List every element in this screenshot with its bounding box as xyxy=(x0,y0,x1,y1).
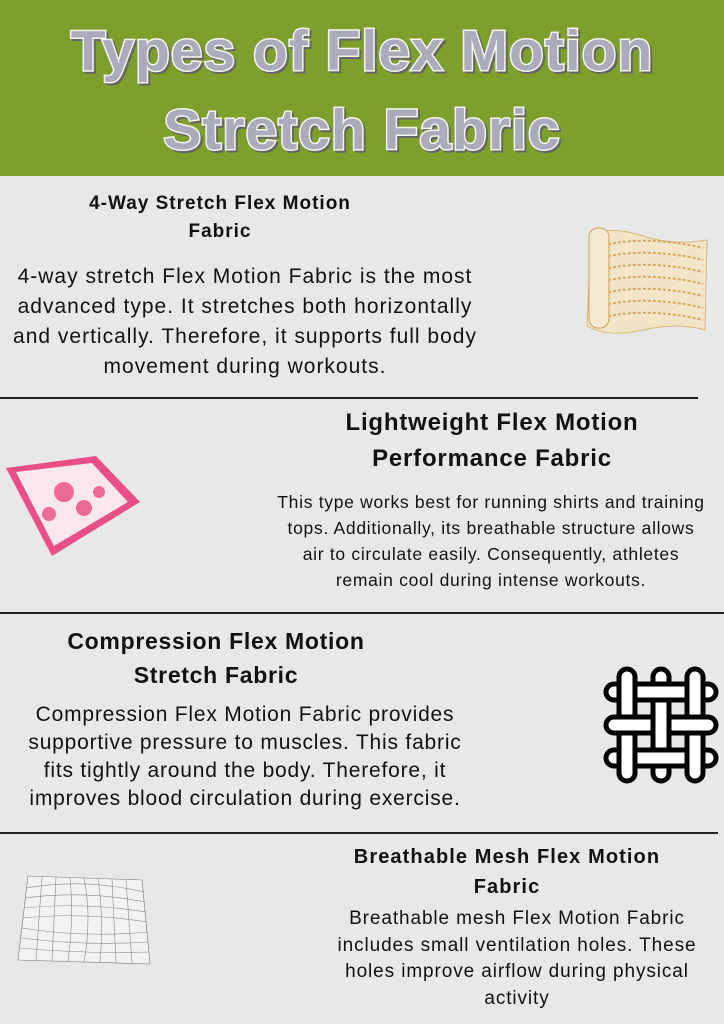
section 4 text: Breathable mesh Flex Motion Fabric xyxy=(349,908,685,929)
section 2 text: remain cool during intense workouts. xyxy=(336,570,646,590)
section 4 text xyxy=(338,908,696,1008)
title: Types of Flex Motion xyxy=(71,19,653,83)
section 3 heading xyxy=(67,628,365,688)
section 2 text: This type works best for running shirts and training xyxy=(277,492,705,512)
section 4 text: activity xyxy=(484,988,550,1008)
section 4 heading xyxy=(354,846,660,898)
section 4 text: holes improve airflow during physical xyxy=(345,961,689,982)
icon: pink scarf xyxy=(6,456,140,556)
section 1 text: movement during workouts. xyxy=(104,355,386,378)
section 2 heading: Performance Fabric xyxy=(372,445,612,472)
title xyxy=(70,19,655,164)
section 3 text: fits tightly around the body. Therefore, it xyxy=(44,759,446,782)
section 4 heading: Fabric xyxy=(474,876,540,898)
title: Stretch Fabric xyxy=(165,100,563,164)
icon: weave xyxy=(604,666,718,784)
title banner xyxy=(0,0,724,176)
section 4 text: includes small ventilation holes. These xyxy=(338,934,696,956)
section 3 heading: Stretch Fabric xyxy=(134,662,298,688)
section 1 heading: 4-Way Stretch Flex Motion xyxy=(89,193,351,214)
title: Types of Flex Motion xyxy=(73,21,655,85)
icon: fabric roll xyxy=(586,228,708,334)
title: Stretch Fabric xyxy=(163,98,561,162)
section 3 text xyxy=(28,703,462,810)
section 4 heading: Breathable Mesh Flex Motion xyxy=(354,846,660,868)
section 1 heading: Fabric xyxy=(188,221,252,242)
section 1 text: 4-way stretch Flex Motion Fabric is the most xyxy=(18,265,472,288)
section 3 text: improves blood circulation during exercise. xyxy=(29,787,461,810)
section 2 text: air to circulate easily. Consequently, athletes xyxy=(303,544,679,564)
section 1 heading xyxy=(89,193,351,242)
section 3 heading: Compression Flex Motion xyxy=(67,628,365,654)
section 1 text xyxy=(13,265,477,378)
icon: mesh xyxy=(18,876,150,964)
section 2 text: tops. Additionally, its breathable structure allows xyxy=(288,518,694,538)
section 1 text: and vertically. Therefore, it supports full body xyxy=(13,325,477,348)
section 2 heading xyxy=(345,409,639,472)
section 2 text xyxy=(277,492,705,590)
section 3 text: supportive pressure to muscles. This fabric xyxy=(28,731,462,754)
section 1 text: advanced type. It stretches both horizontally xyxy=(18,295,472,318)
section 2 heading: Lightweight Flex Motion xyxy=(345,409,639,436)
section 3 text: Compression Flex Motion Fabric provides xyxy=(36,703,454,726)
